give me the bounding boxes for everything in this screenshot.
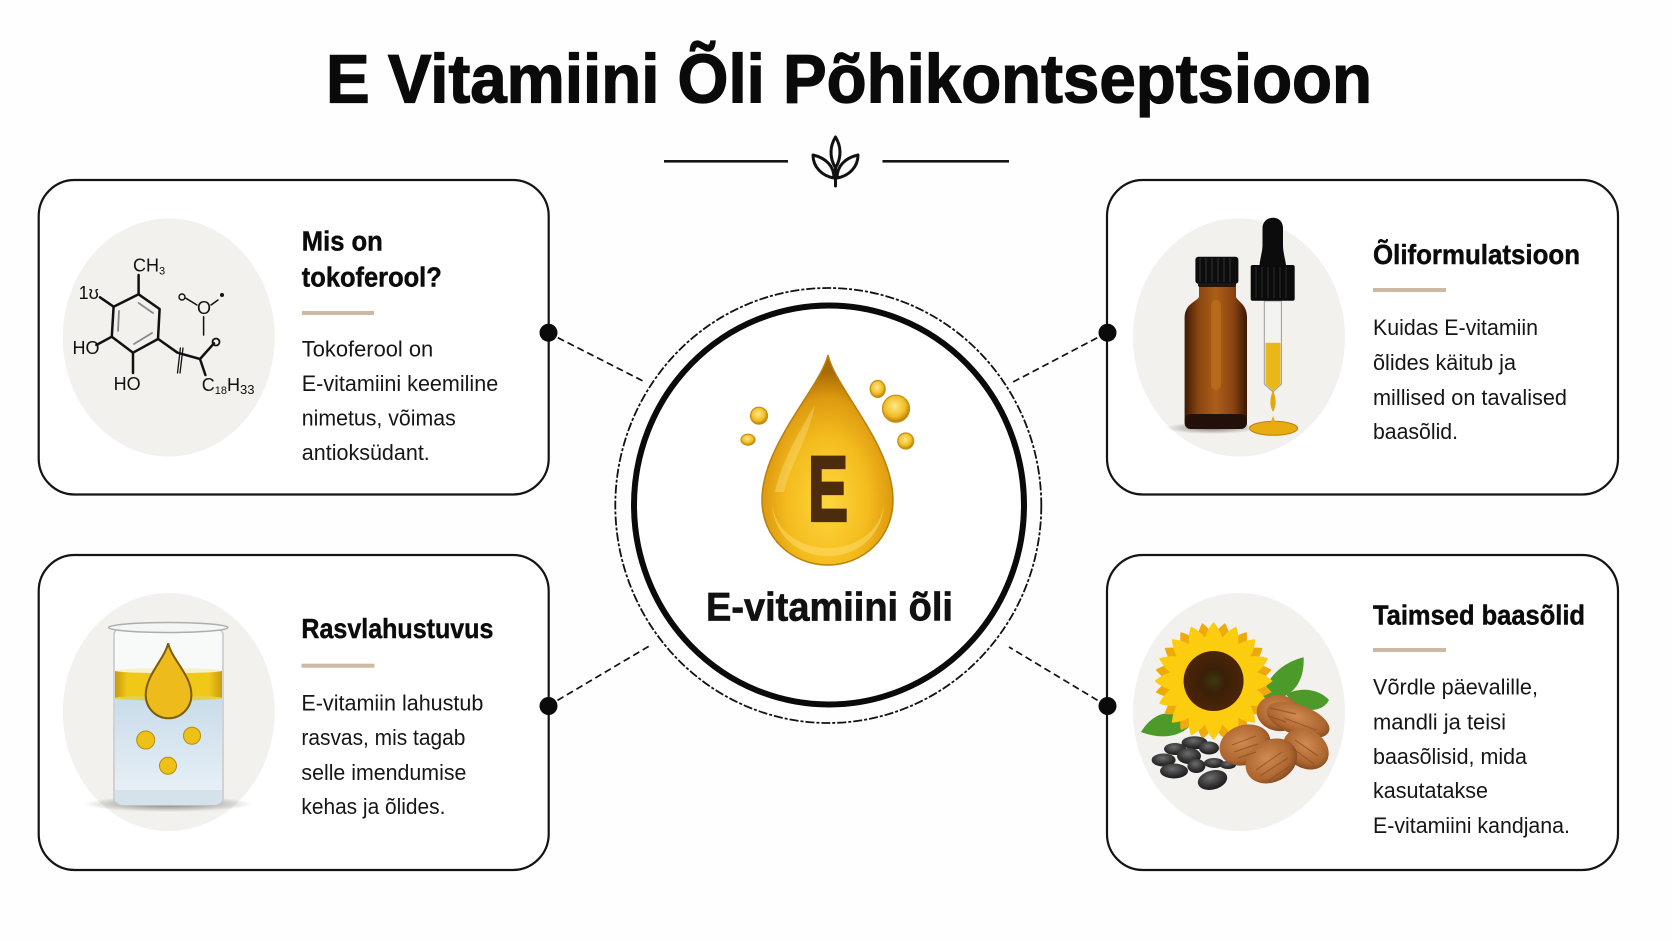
panel: Mis on tokoferool [39,180,557,494]
illustration backdrop [1133,593,1345,831]
card frame [1107,180,1618,494]
body text: E-vitamiini kandjana. [1373,813,1570,838]
body text: nimetus, võimas [302,406,456,431]
body text: antioksüdant. [302,440,430,465]
heading: Mis on [302,226,383,257]
connector: bottom right [1009,647,1107,706]
body text: Tokoferool on [302,337,433,362]
connector: top right [1013,333,1107,382]
panel: Rasvlahustuvus [39,555,557,870]
icon: small oil bubbles [741,380,914,449]
icon: tocopherol molecule: 1ʊ [79,283,99,303]
icon: sunflower [1154,621,1274,741]
icon: tocopherol molecule: 3 [159,266,165,278]
body text: rasvas, mis tagab [301,725,465,750]
accent rule [302,664,374,668]
illustration backdrop [63,218,275,456]
body text: Võrdle päevalille, [1373,674,1538,699]
illustration backdrop [63,593,275,831]
divider with leaf icon [664,137,1009,186]
card frame [1107,555,1618,870]
icon: golden oil drop with E [762,355,893,565]
body text: selle imendumise [301,760,466,785]
large oil drop in beaker [146,643,191,718]
title: E Vitamiini Õli Põhikontseptsioon [326,41,1372,118]
icon: tocopherol molecule: C [202,375,215,395]
body text [1373,674,1570,838]
icon: amber bottle [1166,257,1258,434]
panel: Õliformulatsioon [1098,180,1618,494]
card frame [39,555,549,870]
body text: baasõlid. [1373,419,1458,444]
connector dot [1098,697,1116,715]
connector: top left [548,333,645,382]
body text: kehas ja õlides. [301,794,445,819]
body text [302,337,498,465]
body text [1373,315,1567,444]
icon: tocopherol molecule: 33 [240,382,255,397]
icon: tocopherol molecule: CH [133,256,159,276]
panel: central hub [615,288,1041,723]
heading: tokoferool? [302,262,442,293]
accent rule [1373,648,1446,652]
body text: baasõlisid, mida [1373,744,1527,769]
body text: millised on tavalised [1373,385,1567,410]
icon: sunflower seeds [1152,736,1236,793]
body text: E-vitamiin lahustub [301,691,483,716]
heading: Õliformulatsioon [1373,239,1580,270]
hub label: E-vitamiini õli [706,586,953,630]
panel: Taimsed baasõlid [1098,555,1618,870]
body text: E-vitamiini keemiline [302,371,498,396]
icon: tocopherol molecule: HO [114,374,141,394]
body text: mandli ja teisi [1373,709,1506,734]
connector dot [540,324,558,342]
icon: tocopherol molecule: HO [72,338,100,358]
body text [301,691,483,819]
connector dot [1098,324,1116,342]
body text: kasutatakse [1373,778,1488,803]
connector dot [540,697,558,715]
connector: bottom left [548,645,651,706]
icon: leaf sprout [813,137,858,186]
small oil droplets [137,727,200,774]
icon: tocopherol molecule: 18 [215,385,227,397]
icon: beaker with oil and water [83,622,253,812]
icon: tocopherol molecule: H [227,375,240,395]
icon: dropper with oil [1250,218,1298,435]
icon: tocopherol molecule: O [197,298,211,318]
icon: almonds [1214,691,1336,792]
accent rule [302,311,374,315]
body text: õlides käitub ja [1373,350,1516,375]
body text: Kuidas E-vitamiin [1373,315,1538,340]
heading: Taimsed baasõlid [1373,599,1585,630]
illustration backdrop [1133,218,1345,456]
dashed outer ring [615,288,1041,723]
icon: green leaves [1141,657,1329,736]
heading [302,226,442,293]
card frame [39,180,549,494]
accent rule [1373,288,1446,292]
solid inner ring [634,306,1024,704]
heading: Rasvlahustuvus [301,613,493,644]
icon: golden oil drop with E: E [808,438,848,540]
icon: tocopherol molecule [72,256,255,397]
